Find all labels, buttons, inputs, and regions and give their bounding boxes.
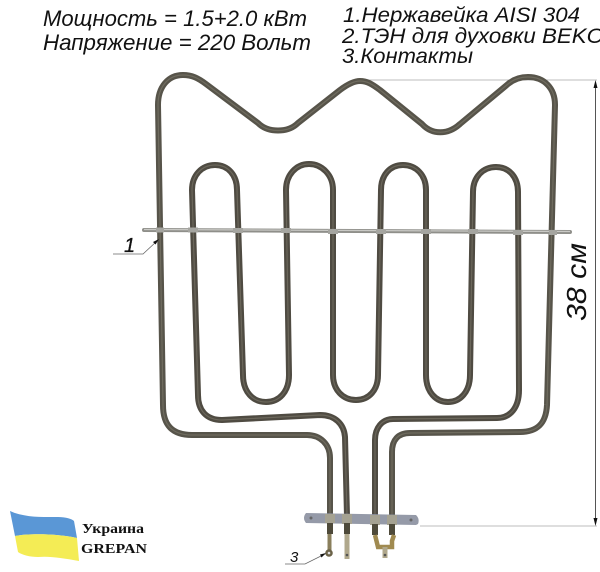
brand text [81, 522, 147, 557]
mounting plate [304, 513, 419, 525]
outer tube [158, 75, 555, 516]
brand text: Украина [82, 522, 144, 537]
brand text: GREPAN [81, 542, 147, 557]
parts list: 2.ТЭН для духовки BEKO [341, 24, 600, 48]
label 3 with leader [285, 549, 326, 566]
parts list: 3.Контакты [342, 44, 473, 68]
specifications text [43, 6, 311, 55]
parts list [341, 3, 600, 68]
dimension: 38 cm [358, 80, 598, 526]
heating element [158, 75, 555, 516]
parts list: 1.Нержавейка AISI 304 [343, 3, 580, 27]
label 1 with leader [113, 235, 159, 257]
contact terminals [325, 523, 394, 559]
label 3 with leader: 3 [290, 549, 299, 566]
Ukrainian flag [10, 511, 79, 561]
label 1 with leader: 1 [124, 235, 135, 257]
stainless steel cross bar [144, 228, 570, 235]
specifications text: Напряжение = 220 Вольт [43, 30, 311, 55]
specifications text: Мощность = 1.5+2.0 кВт [43, 6, 307, 31]
dimension: 38 cm: 38 см [561, 243, 592, 321]
inner tube [192, 164, 519, 516]
